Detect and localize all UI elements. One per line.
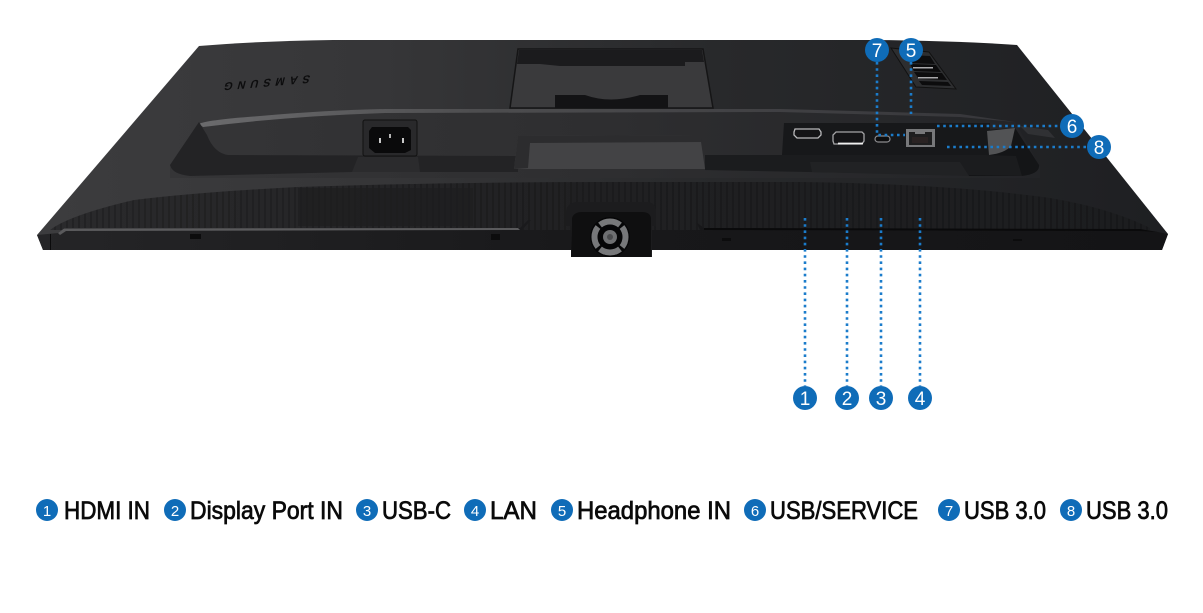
LAN port (906, 129, 935, 147)
SAMSUNG logo: SAMSUNG (223, 72, 312, 92)
left cable recess (170, 122, 518, 176)
shelf below ports (705, 155, 1022, 176)
legend item 5: Headphone IN (577, 497, 731, 525)
legend item 6: 6 (751, 503, 759, 520)
badge 2: 2 (842, 389, 852, 410)
legend item 7: 7 (945, 503, 953, 520)
DisplayPort port (833, 132, 864, 144)
badge 8: 8 (1094, 138, 1104, 159)
leader: 3 (880, 218, 882, 386)
monitor body (37, 40, 1168, 250)
service port (1020, 126, 1055, 138)
HDMI port (794, 129, 821, 138)
leader: 8 (947, 146, 1088, 148)
legend item 1: 1 (43, 503, 51, 520)
legend item 3: USB-C (382, 497, 451, 525)
legend item 3: 3 (363, 503, 371, 520)
grille label block (298, 188, 473, 226)
badge 3 (869, 386, 893, 410)
USB-C port (875, 136, 890, 142)
badge 4 (908, 386, 932, 410)
rear ledge band (170, 109, 1040, 178)
power socket (352, 120, 420, 172)
legend item 8: 8 (1067, 503, 1075, 520)
grille strip (50, 182, 1150, 230)
badge 6 (1060, 114, 1084, 138)
badge 1: 1 (800, 389, 810, 410)
leader: 7 (877, 62, 905, 135)
legend item 7 (938, 497, 1046, 525)
ledge highlight (199, 109, 1015, 127)
badge 8 (1087, 135, 1111, 159)
legend (36, 497, 1168, 525)
legend item 7: USB 3.0 (964, 497, 1046, 525)
joystick button (590, 217, 630, 257)
legend item 4: 4 (471, 503, 479, 520)
badge 7: 7 (872, 41, 882, 62)
badge 5: 5 (906, 41, 916, 62)
legend item 8 (1060, 497, 1168, 525)
stand mount recess (510, 49, 713, 108)
legend item 8: USB 3.0 (1086, 497, 1168, 525)
legend item 1: HDMI IN (64, 497, 150, 525)
legend item 2: Display Port IN (190, 497, 343, 525)
badge 2 (835, 386, 859, 410)
leader: 1 (804, 218, 806, 386)
legend item 2: 2 (171, 503, 179, 520)
bottom bezel (37, 220, 1168, 250)
legend item 5: 5 (558, 503, 566, 520)
badge 7 (865, 38, 889, 62)
centre cover panel (514, 135, 705, 169)
badge 4: 4 (915, 389, 926, 410)
legend item 6: USB/SERVICE (770, 497, 918, 525)
joystick housing (566, 202, 656, 257)
leader: 2 (846, 218, 848, 386)
badge 1 (793, 386, 817, 410)
legend item 1 (36, 497, 150, 525)
legend item 3 (356, 497, 451, 525)
stand clip (987, 128, 1015, 155)
monitor rear (37, 40, 1168, 257)
badge 6: 6 (1067, 117, 1077, 138)
legend item 4 (464, 497, 537, 525)
leader: 5 (910, 62, 912, 114)
port panel (782, 123, 990, 155)
legend item 4: LAN (490, 497, 537, 525)
right cable recess (960, 128, 1039, 176)
badge 3: 3 (876, 389, 886, 410)
leader: 4 (919, 218, 921, 386)
leader: 6 (937, 125, 1060, 127)
badge 5 (899, 38, 923, 62)
USB hub slots (891, 48, 956, 89)
